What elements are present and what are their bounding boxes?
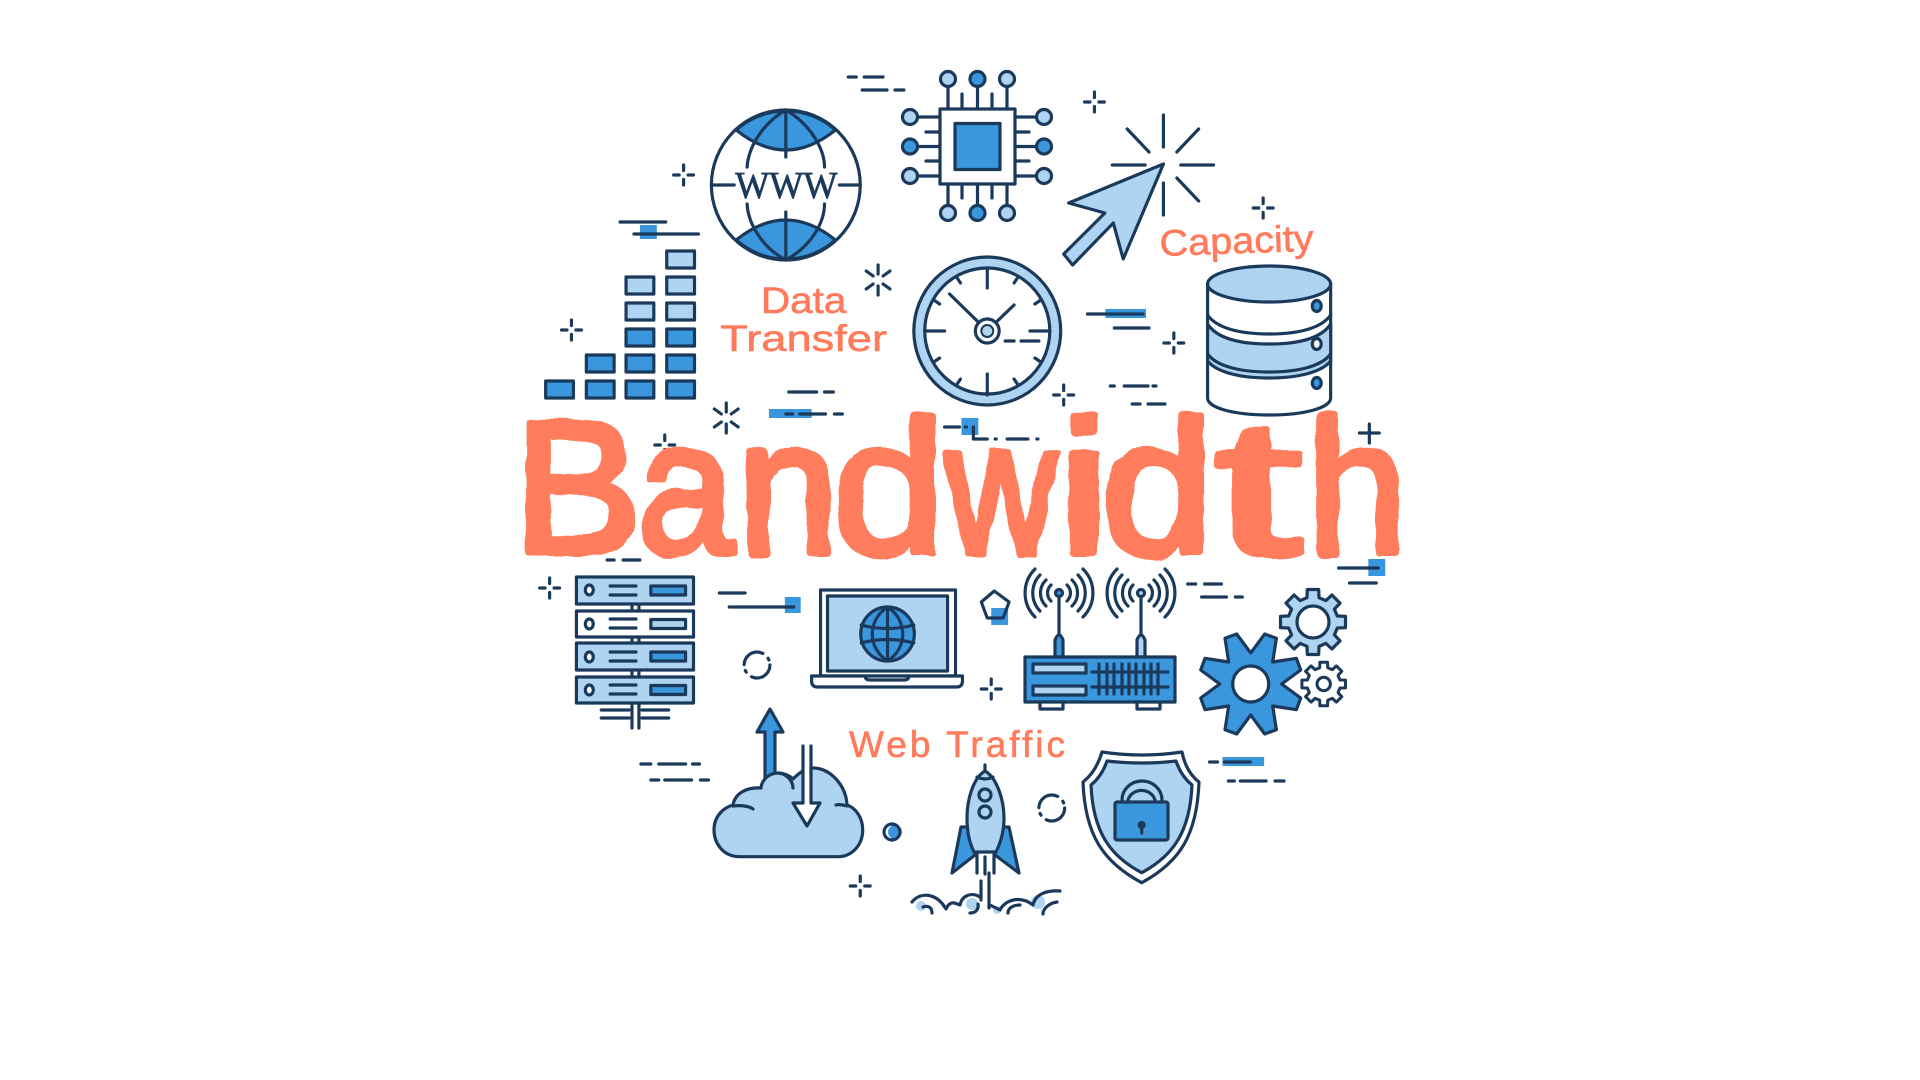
icon: database cylinders [1208, 266, 1331, 415]
label: Data Transfer: Data [761, 280, 847, 321]
title: Bandwidth: h [1307, 382, 1407, 594]
icon: microchip [902, 72, 1052, 220]
icon: clock [914, 257, 1061, 405]
icon: equalizer bars [546, 251, 695, 398]
title: Bandwidth: i [1058, 382, 1110, 594]
icon: cursor arrow with rays [1064, 115, 1214, 265]
title: Bandwidth: d [1101, 382, 1214, 594]
icon: laptop with globe [812, 590, 962, 687]
title: Bandwidth: t [1214, 382, 1301, 594]
icon: wifi router [1025, 569, 1175, 709]
icon: shield with padlock [1083, 752, 1199, 883]
label: Data Transfer [720, 280, 887, 359]
icon: server rack [576, 577, 694, 728]
label: Web Traffic: Web Traffic [849, 724, 1065, 765]
decorative dashes and blue accents [607, 77, 1385, 840]
label: Capacity: Capacity [1159, 218, 1315, 264]
icon: gears [1201, 590, 1346, 734]
icon: cloud with arrows [714, 709, 863, 857]
title: Bandwidth: w [944, 382, 1058, 594]
title: Bandwidth: a [637, 382, 734, 594]
title: Bandwidth: d [832, 382, 945, 594]
title: Bandwidth: n [738, 382, 838, 594]
label: Data Transfer: Transfer [720, 318, 887, 359]
decorative sparkles [540, 92, 1379, 896]
title: Bandwidth: B [514, 382, 641, 594]
icon: rocket launch [912, 765, 1060, 914]
label: WWW: WWW [735, 165, 838, 207]
icon: www globe [711, 110, 860, 260]
